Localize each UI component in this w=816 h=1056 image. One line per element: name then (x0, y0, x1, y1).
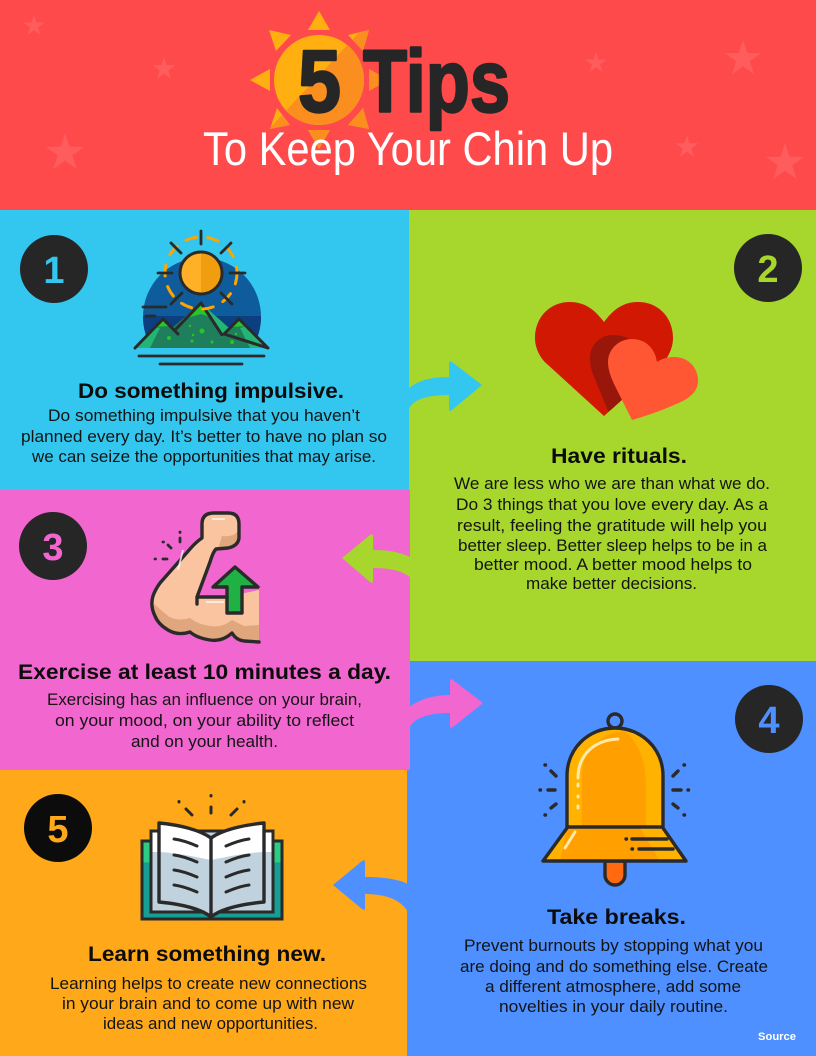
heading: Take breaks. (547, 906, 686, 929)
number badge 3 (19, 512, 87, 580)
body text: a different atmosphere, add some (485, 977, 741, 996)
icon: bell (540, 714, 688, 885)
body text (50, 974, 367, 1033)
number badge 4 (735, 685, 803, 753)
body text: make better decisions. (526, 574, 697, 593)
body text (21, 406, 387, 466)
body text: and on your health. (131, 732, 278, 751)
body text: are doing and do something else. Create (460, 957, 768, 976)
number badge 5: 5 (47, 809, 69, 851)
body text: We are less who we are than what we do. (454, 474, 770, 493)
heading: Learn something new. (88, 943, 326, 966)
panel: tip 3 content (18, 512, 391, 751)
panel: tip 4 background (407, 661, 816, 1056)
body text: novelties in your daily routine. (499, 997, 728, 1016)
decorative stars (24, 15, 804, 179)
heading: Do something impulsive. (78, 380, 344, 403)
panel: tip 5 background (0, 770, 407, 1056)
body text: Do 3 things that you love every day. As a (456, 495, 769, 514)
icon: mountains and sun (135, 231, 268, 364)
icon: hearts (535, 302, 698, 420)
body text: Exercising has an influence on your brain, (47, 690, 362, 709)
body text (460, 936, 768, 1016)
number badge 1 (20, 235, 88, 303)
number badge 1: 1 (43, 250, 65, 292)
arrow: tip 3 to tip 4 (409, 679, 483, 728)
body text: result, feeling the gratitude will help you (457, 516, 767, 535)
panel: header (0, 0, 816, 210)
body text: Prevent burnouts by stopping what you (464, 936, 763, 955)
body text: better sleep. Better sleep helps to be in a (458, 536, 768, 555)
panel: tip 1 background (0, 210, 409, 490)
heading: Exercise at least 10 minutes a day. (18, 661, 391, 684)
title: 5 Tips (298, 32, 510, 130)
panel: tip 3 background (0, 490, 410, 770)
number badge 4: 4 (758, 700, 780, 742)
icon: open book (142, 796, 282, 919)
panel: tip 5 content (24, 794, 367, 1033)
body text: planned every day. It’s better to have no plan so (21, 427, 387, 446)
number badge 3: 3 (42, 527, 64, 569)
body text: in your brain and to come up with new (62, 994, 355, 1013)
arrow: tip 4 to tip 5 (333, 860, 408, 912)
body text (454, 474, 770, 593)
body text: on your mood, on your ability to reflect (55, 711, 354, 730)
body text: Do something impulsive that you haven’t (48, 406, 360, 425)
source label: Source (758, 1031, 796, 1043)
arrow: tip 2 to tip 3 (342, 534, 410, 583)
number badge 2 (734, 234, 802, 302)
body text: Learning helps to create new connections (50, 974, 367, 993)
body text: ideas and new opportunities. (103, 1014, 318, 1033)
subtitle: To Keep Your Chin Up (203, 122, 613, 175)
arrow: tip 1 to tip 2 (408, 361, 482, 411)
panel: tip 2 content (454, 234, 802, 593)
number badge 2: 2 (757, 249, 779, 291)
body text (47, 690, 362, 751)
title: 5 Tips: Tips (363, 32, 510, 130)
number badge 5 (24, 794, 92, 862)
heading: Have rituals. (551, 445, 687, 468)
body text: better mood. A better mood helps to (474, 555, 752, 574)
panel: tip 2 background (409, 210, 816, 661)
body text: we can seize the opportunities that may arise. (31, 447, 376, 466)
icon: sun (250, 11, 388, 149)
panel: tip 4 content (460, 685, 803, 1043)
title: 5 Tips: 5 (298, 32, 341, 130)
icon: flexed arm with arrow (152, 513, 259, 642)
panel: tip 1 content (20, 231, 387, 466)
